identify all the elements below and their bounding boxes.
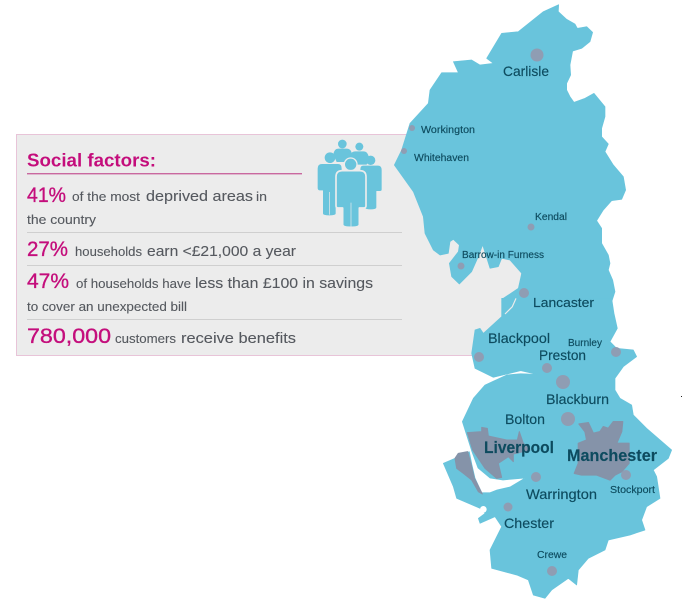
city: Kendal: Kendal xyxy=(535,212,567,223)
map region: south xyxy=(443,298,672,598)
city: Liverpool: Liverpool xyxy=(484,438,554,457)
stat: 27 percent: households xyxy=(75,245,142,259)
city: Blackpool: Blackpool xyxy=(488,330,550,346)
city: Crewe: Crewe xyxy=(537,549,567,561)
stat: 41 percent xyxy=(27,184,267,227)
city: Whitehaven: Whitehaven xyxy=(414,153,469,164)
stat: 47 percent xyxy=(27,270,373,314)
city: Burnley: Burnley xyxy=(568,337,603,349)
stat: 41 percent: 41% xyxy=(27,184,66,207)
stat: 47 percent: of households have xyxy=(76,277,191,291)
map detail: river and inlet xyxy=(480,298,516,513)
city: Preston: Preston xyxy=(539,347,586,363)
stat: 41 percent: of the most xyxy=(72,190,141,204)
stat: 780,000 customers xyxy=(27,325,296,348)
urban area: Liverpool xyxy=(467,427,530,478)
stat: 27 percent: 27% xyxy=(27,238,68,261)
stat: 27 percent xyxy=(27,238,296,261)
city: Preston xyxy=(539,347,586,373)
heading: social factors: Social factors: xyxy=(27,150,156,170)
city: Blackpool xyxy=(474,330,550,362)
stat: 41 percent: the country xyxy=(27,213,97,227)
urban area: Manchester xyxy=(574,422,629,480)
city: Lancaster xyxy=(519,288,595,310)
city: Bolton: Bolton xyxy=(505,411,545,427)
city: Carlisle: Carlisle xyxy=(503,63,549,79)
stat: 780,000 customers: receive benefits xyxy=(181,331,296,347)
city: Chester: Chester xyxy=(504,515,554,531)
map region: north xyxy=(394,5,626,302)
city: Blackburn: Blackburn xyxy=(546,391,609,407)
stat: 47 percent: 47% xyxy=(27,270,69,293)
city: Barrow-in Furness xyxy=(458,250,544,270)
city: Warrington: Warrington xyxy=(526,486,597,502)
stat: 780,000 customers: 780,000 xyxy=(27,325,111,348)
stat: 47 percent: less than £100 in savings xyxy=(195,276,373,292)
city: Manchester: Manchester xyxy=(567,446,657,465)
stat: 780,000 customers: customers xyxy=(115,332,176,346)
city: Whitehaven xyxy=(401,148,469,164)
stat: 41 percent: deprived areas xyxy=(146,189,253,205)
city: Carlisle xyxy=(503,48,549,79)
city: Burnley xyxy=(568,337,621,357)
icon: group of people xyxy=(317,140,382,227)
city: Warrington xyxy=(526,472,597,502)
city: Stockport xyxy=(610,470,655,496)
city: Lancaster: Lancaster xyxy=(533,295,595,310)
city: Bolton xyxy=(505,411,575,427)
map: north west england xyxy=(394,5,672,598)
city: Stockport: Stockport xyxy=(610,484,655,496)
stat: 41 percent: in xyxy=(256,190,267,204)
city: Barrow-in Furness: Barrow-in Furness xyxy=(462,250,544,261)
stat: 47 percent: to cover an unexpected bill xyxy=(27,300,187,314)
panel: social factors background xyxy=(16,134,522,356)
city: Chester xyxy=(504,502,554,531)
city: Crewe xyxy=(537,549,567,576)
stat: 27 percent: earn <£21,000 a year xyxy=(147,244,296,260)
city: Workington: Workington xyxy=(421,125,475,136)
city: Kendal xyxy=(528,212,567,230)
city: Blackburn xyxy=(546,375,609,407)
urban area: Wirral xyxy=(455,452,482,494)
